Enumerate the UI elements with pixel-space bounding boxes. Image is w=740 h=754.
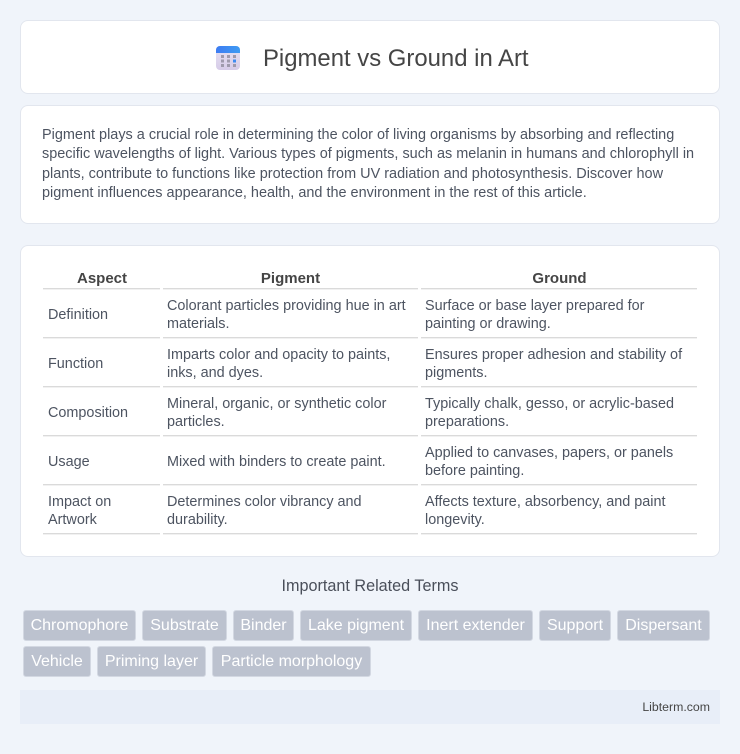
- icon: calendar grid: [216, 46, 240, 70]
- chip: Dispersant: [617, 610, 710, 641]
- row: usage: Applied to canvases, papers, or panels: [425, 445, 673, 461]
- row: impact on artwork: Impact on: [48, 494, 111, 510]
- row: impact on artwork: Artwork: [48, 512, 97, 528]
- row: definition: Colorant particles providing hue in art: [167, 298, 406, 314]
- row: function: [48, 347, 682, 381]
- row: function: Function: [48, 356, 103, 372]
- intro card: [20, 105, 720, 224]
- row: definition: materials.: [167, 316, 229, 332]
- chip: Binder: [233, 610, 294, 641]
- row: function: pigments.: [425, 365, 487, 381]
- header card: [20, 20, 720, 94]
- row: function: inks, and dyes.: [167, 365, 263, 381]
- row: impact on artwork: [48, 494, 666, 528]
- chip: Particle morphology: [212, 646, 371, 677]
- row: usage: before painting.: [425, 463, 524, 479]
- chip: Lake pigment: Lake pigment: [308, 617, 404, 634]
- intro text: Pigment plays a crucial role in determining the color of living organisms by absorbing and reflecting: [42, 127, 674, 143]
- table header: Ground: [532, 270, 587, 287]
- row: usage: Usage: [48, 454, 90, 470]
- chip: Chromophore: [23, 610, 136, 641]
- chip: Particle morphology: Particle morphology: [221, 653, 362, 670]
- row: impact on artwork: Determines color vibrancy and: [167, 494, 362, 510]
- table header: Pigment: [261, 270, 320, 287]
- row: function: Imparts color and opacity to paints,: [167, 347, 390, 363]
- row: impact on artwork: Affects texture, absorbency, and paint: [425, 494, 666, 510]
- row: impact on artwork: longevity.: [425, 512, 485, 528]
- row: composition: [48, 396, 674, 430]
- chip: Priming layer: [97, 646, 206, 677]
- chip: Support: [539, 610, 611, 641]
- intro text: pigment influences appearance, health, and the environment in the rest of this article.: [42, 185, 587, 201]
- chip: Dispersant: Dispersant: [625, 617, 702, 634]
- row: definition: painting or drawing.: [425, 316, 551, 332]
- footer credit: Libterm.com: [642, 700, 710, 714]
- title: Pigment vs Ground in Art: [263, 45, 529, 72]
- row: composition: Typically chalk, gesso, or acrylic-based: [425, 396, 674, 412]
- row: composition: Mineral, organic, or synthetic color: [167, 396, 386, 412]
- row: usage: Mixed with binders to create paint.: [167, 454, 386, 470]
- intro text: plants, contribute to functions like protection from UV radiation and photosynthesis. Discover how: [42, 166, 663, 182]
- chip: Chromophore: Chromophore: [31, 617, 128, 634]
- chip: Substrate: [142, 610, 227, 641]
- chip: Substrate: Substrate: [150, 617, 219, 634]
- chip: Inert extender: Inert extender: [426, 617, 525, 634]
- chip: Priming layer: Priming layer: [105, 653, 198, 670]
- related terms chips: [23, 610, 710, 677]
- chip: Inert extender: [418, 610, 533, 641]
- related terms heading: Important Related Terms: [282, 577, 458, 595]
- chip: Vehicle: [23, 646, 91, 677]
- chip: Lake pigment: [300, 610, 412, 641]
- row: composition: particles.: [167, 414, 225, 430]
- table header: [77, 270, 587, 287]
- row: composition: preparations.: [425, 414, 509, 430]
- table header: Aspect: [77, 270, 127, 287]
- intro text: [42, 127, 694, 201]
- intro text: specific wavelengths of light. Various types of pigments, such as melanin in humans and chlorophyll in: [42, 146, 694, 162]
- comparison table card: [20, 245, 720, 557]
- chip: Vehicle: Vehicle: [31, 653, 83, 670]
- row: definition: [48, 298, 644, 332]
- row: impact on artwork: durability.: [167, 512, 228, 528]
- row: function: Ensures proper adhesion and stability of: [425, 347, 682, 363]
- chip: Binder: Binder: [240, 617, 287, 634]
- row: definition: Surface or base layer prepared for: [425, 298, 644, 314]
- chip: Support: Support: [547, 617, 603, 634]
- row: definition: Definition: [48, 307, 108, 323]
- row: composition: Composition: [48, 405, 128, 421]
- footer: [20, 690, 720, 724]
- row: usage: [48, 445, 673, 479]
